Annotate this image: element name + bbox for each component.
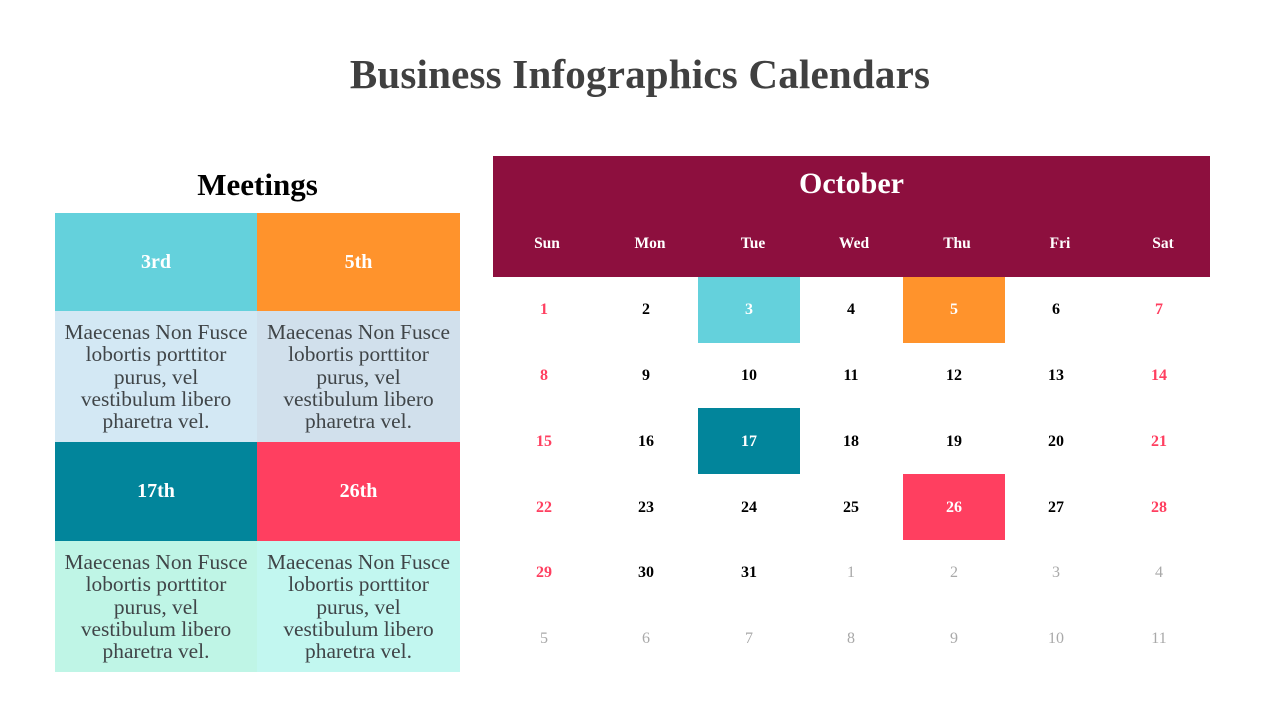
calendar grid: 13 (1048, 367, 1064, 384)
date tile: 26th: 26th (340, 480, 377, 502)
weekday: Wed: Wed (839, 235, 869, 252)
calendar grid: 9 (950, 630, 958, 647)
text block: 17th (55, 541, 257, 672)
row 4: 22 (536, 498, 552, 516)
text block: 17th: lobortis porttitor (86, 572, 226, 596)
calendar grid: 25 (843, 498, 859, 516)
calendar grid: 2 (642, 301, 650, 318)
row 5: 29 (536, 564, 552, 581)
text block: 5th (257, 311, 460, 442)
highlighted day 26 (903, 474, 1005, 540)
text block: 5th: purus, vel (316, 365, 401, 389)
highlighted day 17: 17 (741, 432, 757, 450)
calendar grid: 2 (950, 564, 958, 581)
weekday: Tue: Tue (741, 235, 765, 252)
calendar grid: 12 (946, 367, 962, 384)
row 2: 8 (540, 367, 548, 384)
panel: meetings (55, 167, 460, 672)
calendar grid: 10 (1048, 630, 1064, 647)
month name: October (799, 167, 904, 200)
calendar header (493, 156, 1210, 277)
calendar grid: 7 (1155, 301, 1163, 318)
meetings heading: Meetings (197, 167, 318, 202)
calendar grid: 6 (1052, 301, 1060, 318)
text block: 17th: pharetra vel. (103, 639, 209, 663)
calendar grid: 3 (1052, 564, 1060, 581)
highlighted day 17 (698, 408, 800, 474)
calendar grid: 1 (847, 564, 855, 581)
weekday: Sun: Sun (534, 235, 560, 252)
calendar grid: 27 (1048, 498, 1064, 516)
text block: 17th: Maecenas Non Fusce (65, 550, 247, 574)
calendar grid: 7 (745, 630, 753, 647)
text block: 3rd: pharetra vel. (103, 409, 209, 433)
highlighted day 26: 26 (946, 498, 962, 516)
calendar grid: 16 (638, 432, 654, 450)
text block: 26th: purus, vel (316, 595, 401, 619)
calendar grid: 4 (1155, 564, 1163, 581)
row 1: 1 (540, 301, 548, 318)
calendar grid: 30 (638, 564, 654, 581)
row 3: 15 (536, 432, 552, 450)
text block: 3rd: purus, vel (114, 365, 198, 389)
weekday: Sat: Sat (1152, 235, 1174, 252)
date tile: 5th: 5th (345, 250, 372, 272)
text block: 3rd: vestibulum libero (81, 387, 231, 411)
text block: 26th: lobortis porttitor (288, 572, 429, 596)
text block: 5th: lobortis porttitor (288, 342, 429, 366)
row 6: 5 (540, 630, 548, 647)
text block: 17th: vestibulum libero (81, 617, 231, 641)
date tile: 3rd: 3rd (141, 250, 171, 272)
calendar grid: 20 (1048, 432, 1064, 450)
weekday: Thu: Thu (943, 235, 971, 252)
calendar grid: 19 (946, 432, 962, 450)
calendar grid: 24 (741, 498, 757, 516)
date tile: 5th (257, 213, 460, 311)
text block: 17th: purus, vel (114, 595, 198, 619)
calendar grid: 14 (1151, 367, 1167, 384)
calendar grid: 18 (843, 432, 859, 450)
calendar grid: 8 (847, 630, 855, 647)
text block: 26th: pharetra vel. (305, 639, 412, 663)
highlighted day 3 (698, 277, 800, 343)
text block: 3rd (55, 311, 257, 442)
weekday: Fri: Fri (1050, 235, 1070, 252)
date tile: 26th (257, 442, 460, 541)
highlighted day 5: 5 (950, 301, 958, 318)
date tile: 17th (55, 442, 257, 541)
calendar grid: 11 (1151, 630, 1167, 647)
text block: 3rd: Maecenas Non Fusce (65, 320, 247, 344)
text block: 5th: pharetra vel. (305, 409, 412, 433)
calendar grid: 23 (638, 498, 654, 516)
text block: 5th: vestibulum libero (283, 387, 434, 411)
calendar grid: 4 (847, 301, 855, 318)
date tile: 3rd (55, 213, 257, 311)
text block: 26th (257, 541, 460, 672)
text block: 26th: Maecenas Non Fusce (267, 550, 450, 574)
calendar grid: 10 (741, 367, 757, 384)
calendar grid: 9 (642, 367, 650, 384)
calendar grid: 6 (642, 630, 650, 647)
text block: 26th: vestibulum libero (283, 617, 434, 641)
text block: 5th: Maecenas Non Fusce (267, 320, 450, 344)
title: Business Infographics Calendars (350, 51, 930, 97)
highlighted day 5 (903, 277, 1005, 343)
text block: 3rd: lobortis porttitor (86, 342, 226, 366)
highlighted day 3: 3 (745, 301, 753, 318)
calendar grid: 11 (843, 367, 859, 384)
calendar grid: 21 (1151, 432, 1167, 450)
calendar grid (536, 277, 1167, 647)
date tile: 17th: 17th (137, 480, 175, 502)
weekday: Mon: Mon (634, 235, 666, 252)
calendar grid: 31 (741, 564, 757, 581)
calendar grid: 28 (1151, 498, 1167, 516)
